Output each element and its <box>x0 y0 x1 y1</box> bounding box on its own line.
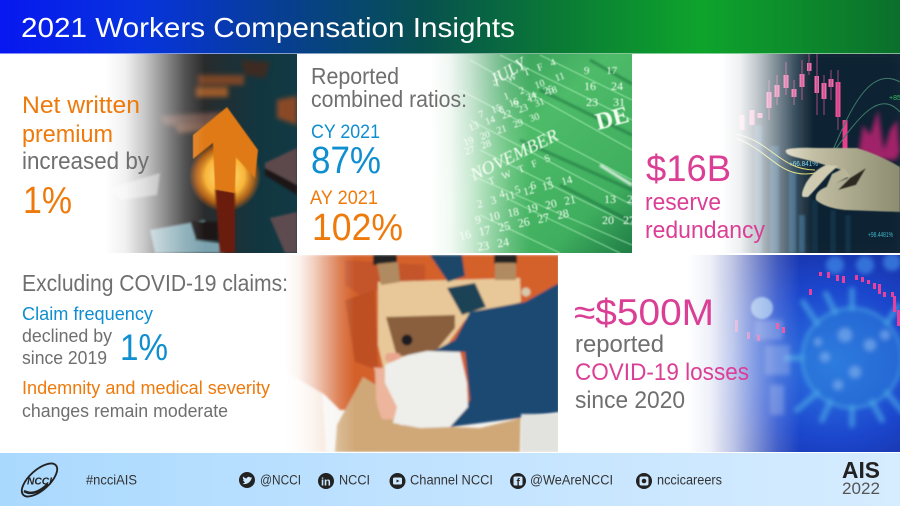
curves <box>735 78 900 174</box>
ratios heading: Reported <box>311 63 399 89</box>
panel: excluding COVID-19 claims <box>22 255 559 452</box>
losses text: COVID-19 losses <box>575 359 749 386</box>
dark arrows <box>110 148 297 253</box>
hand <box>786 148 900 212</box>
panel: reserve redundancy <box>632 54 900 253</box>
AIS 2022 logo: 2022 <box>842 480 880 498</box>
NCCI logo <box>16 458 63 502</box>
claim frequency stat: since 2019 <box>22 347 107 368</box>
calendar text: 13 14 22 23 31 <box>467 96 546 134</box>
virus <box>787 290 900 425</box>
bib <box>378 278 521 375</box>
calendar text: 4 5 6 7 <box>498 175 554 201</box>
calendar text: 7 15 16 24 25 <box>477 83 555 121</box>
straps <box>373 255 397 265</box>
reserve text: $16B <box>646 148 731 189</box>
chart labels: +66.841% <box>789 159 818 168</box>
header banner <box>0 0 900 54</box>
calendar text: 23 24 <box>476 235 510 254</box>
COVID exclusions heading: Excluding COVID-19 claims: <box>22 270 288 296</box>
AIS 2022 logo <box>842 457 880 498</box>
forearm <box>308 388 326 452</box>
facebook: f <box>516 478 520 488</box>
calendar text: 23 31 <box>586 95 625 109</box>
calendar text <box>458 53 639 254</box>
pink candles <box>735 272 900 341</box>
calendar text: 8 9 17 18 <box>497 84 559 116</box>
premium text: Net written <box>22 92 140 119</box>
calendar text: 27 28 <box>463 138 493 158</box>
CY 2021 stat: CY 2021 <box>311 122 380 143</box>
calendar text: 1 2 10 11 <box>502 71 566 103</box>
arrow glow <box>189 140 261 212</box>
twitter handle <box>239 472 301 488</box>
claim frequency stat: 1% <box>120 327 168 368</box>
losses text: reported <box>575 331 664 358</box>
calendar text: NOVEMBER <box>466 125 561 185</box>
losses text: ≈$500M <box>574 292 714 333</box>
panel: COVID-19 losses <box>559 253 900 452</box>
claim frequency stat: declined by <box>22 325 113 346</box>
photo: trading chart and hand <box>731 54 900 253</box>
AY 2021 stat <box>310 188 403 249</box>
severity note <box>22 377 271 421</box>
calendar text: 16 24 <box>584 79 623 93</box>
calendar text: 13 20 <box>604 192 639 206</box>
claim frequency stat <box>22 303 168 368</box>
title: 2021 Workers Compensation Insights <box>21 12 515 43</box>
linkedin: in <box>321 476 331 488</box>
severity note: Indemnity and medical severity <box>22 377 271 398</box>
photo: green calendar <box>441 54 632 253</box>
instagram <box>636 472 722 489</box>
calendar text: 19 20 21 29 30 <box>462 111 541 149</box>
sling <box>432 283 559 427</box>
severity note: changes remain moderate <box>22 400 228 421</box>
ratios heading: combined ratios: <box>311 86 467 112</box>
premium text: premium <box>22 121 113 148</box>
blurred red chart <box>858 110 900 160</box>
arrow stem shadow <box>215 189 235 253</box>
calendar text: 2 3 11 12 13 14 <box>476 174 574 211</box>
panel: net written premium <box>0 54 297 253</box>
photo: injured worker with arm sling <box>285 255 559 452</box>
reserve text: reserve <box>645 189 721 216</box>
calendar text: T W T F S <box>487 153 552 188</box>
facebook: @WeAreNCCI <box>530 472 613 488</box>
claim frequency stat: Claim frequency <box>22 303 154 324</box>
calendar text: 9 17 <box>584 65 618 77</box>
NCCI logo: NCCI <box>27 476 52 488</box>
premium text <box>22 92 149 222</box>
pocket button <box>402 334 412 346</box>
lower tan overalls <box>335 377 521 452</box>
linkedin: NCCI <box>339 472 370 488</box>
losses text <box>574 292 749 414</box>
photo: orange rising arrow <box>117 54 297 253</box>
instagram: nccicareers <box>657 472 722 488</box>
shirt <box>285 255 559 410</box>
hand <box>374 366 402 420</box>
reserve text: redundancy <box>645 217 765 244</box>
AY 2021 stat: 102% <box>312 207 403 249</box>
blue bars <box>755 125 851 253</box>
twitter handle: @NCCI <box>260 472 301 488</box>
hashtag: #ncciAIS <box>86 472 137 488</box>
CY 2021 stat: 87% <box>311 140 381 182</box>
panel: combined ratios <box>297 53 639 254</box>
calendar text: DE <box>593 102 632 136</box>
AY 2021 stat: AY 2021 <box>310 188 378 209</box>
premium text: 1% <box>23 180 72 222</box>
pink candlesticks <box>740 54 848 150</box>
ratios heading <box>311 63 467 112</box>
map dots <box>755 320 790 415</box>
AIS 2022 logo: AIS <box>842 457 880 483</box>
premium text: increased by <box>22 148 149 175</box>
youtube: Channel NCCI <box>410 472 493 488</box>
calendar text: JULY <box>486 53 531 89</box>
footer bar <box>0 453 900 506</box>
linkedin <box>318 472 370 489</box>
orange arrow <box>193 107 258 193</box>
cast <box>385 351 468 428</box>
photo: virus over world map <box>699 255 900 452</box>
calendar text: T W T F 4 <box>492 57 557 90</box>
calendar text: 9 10 18 19 20 21 <box>474 194 577 227</box>
pocket <box>386 315 455 357</box>
calendar text: 20 27 <box>602 213 635 227</box>
CY 2021 stat <box>311 122 381 182</box>
losses text: since 2020 <box>575 387 685 414</box>
reserve text <box>645 148 765 244</box>
calendar text: 16 17 25 26 27 28 <box>458 206 570 243</box>
